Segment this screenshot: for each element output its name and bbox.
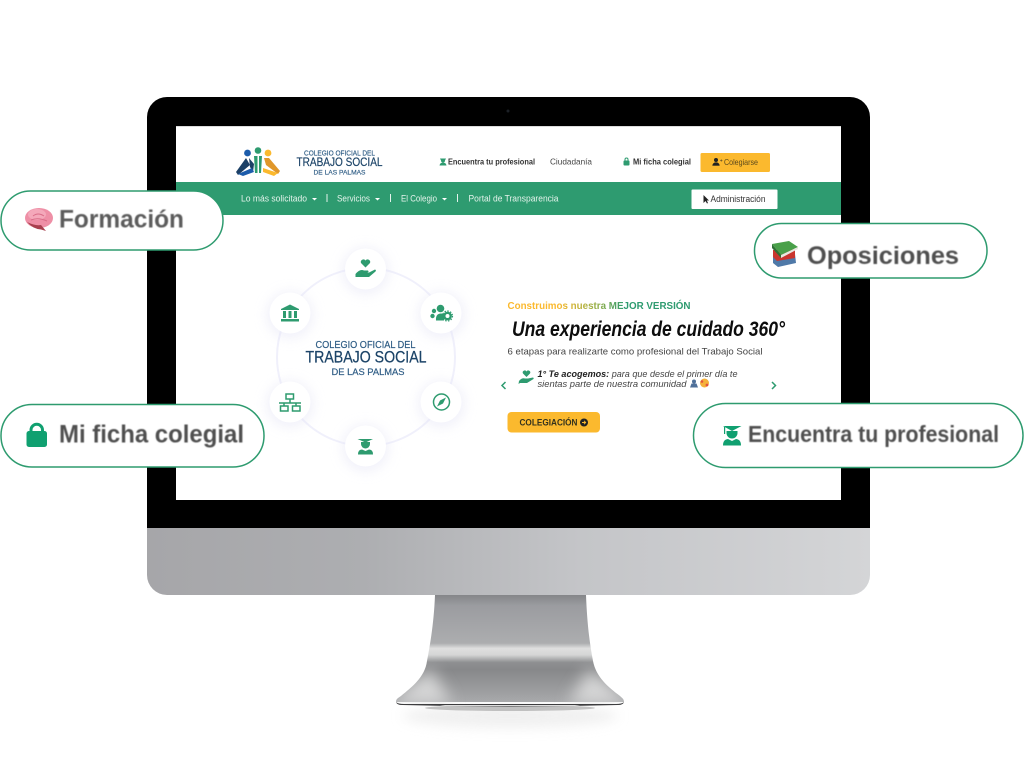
pill: oposiciones <box>754 224 987 278</box>
button: colegiarse: Colegiarse <box>724 158 758 167</box>
node: compass <box>420 382 462 422</box>
button: colegiarse <box>700 153 770 172</box>
screen <box>176 126 841 500</box>
subtitle: 6 etapas para realizarte como profesional del Trabajo Social <box>508 346 762 358</box>
node: hand with heart <box>345 248 386 290</box>
logo wordmark: DE LAS PALMAS <box>314 170 366 176</box>
pill: formacion <box>1 191 223 250</box>
title: Una experiencia de cuidado 360° <box>512 318 785 341</box>
monitor stand <box>390 595 630 728</box>
node: institution <box>270 292 310 334</box>
label: Oposiciones <box>807 242 959 270</box>
label: Mi ficha colegial <box>59 420 244 448</box>
arrow left <box>502 382 506 389</box>
carousel text <box>538 369 738 389</box>
centre wordmark: TRABAJO SOCIAL <box>306 348 426 366</box>
navigation bar <box>176 182 841 215</box>
monitor bezel <box>147 97 870 528</box>
carousel <box>502 369 776 389</box>
website header <box>236 147 770 176</box>
nav menu <box>241 194 559 204</box>
logo wordmark <box>296 150 383 176</box>
label: Formación <box>59 206 184 234</box>
button: colegiacion <box>508 412 600 432</box>
icon: books <box>772 241 798 267</box>
pill: mi ficha colegial <box>1 404 264 467</box>
node: graduate <box>345 426 386 466</box>
pill: encuentra tu profesional <box>694 404 1023 468</box>
centre wordmark <box>306 339 426 378</box>
centre wordmark: COLEGIO OFICIAL DEL <box>316 339 416 351</box>
hero content <box>502 299 785 432</box>
label: Encuentra tu profesional <box>748 421 999 447</box>
logo <box>236 147 383 176</box>
diagram: six stages ring <box>267 248 464 471</box>
logo wordmark: TRABAJO SOCIAL <box>296 155 383 169</box>
carousel text: 1° Te acogemos: para que desde el primer día te <box>538 369 738 379</box>
node shadows <box>267 248 464 471</box>
button: administracion <box>692 190 778 209</box>
monitor chin <box>147 527 870 595</box>
icon: graduate <box>723 426 742 446</box>
nav menu: Lo más solicitado <box>241 194 307 204</box>
icon: hand with heart <box>518 370 534 384</box>
icon: lock <box>26 424 47 447</box>
node: users and gear <box>420 292 462 334</box>
carousel text: sientas parte de nuestra comunidad <box>538 379 688 389</box>
tagline: Construimos nuestra MEJOR VERSIÓN <box>508 299 690 312</box>
logo wordmark: COLEGIO OFICIAL DEL <box>304 150 375 158</box>
button: colegiacion: COLEGIACIÓN <box>520 416 578 428</box>
header link: ciudadania: Ciudadanía <box>550 158 592 166</box>
icon: emoji group <box>690 378 709 388</box>
icon: brain <box>25 208 53 231</box>
monitor <box>147 97 870 728</box>
arrow right <box>772 382 776 389</box>
header link: mi ficha colegial: Mi ficha colegial <box>633 158 691 166</box>
node: network <box>270 382 310 422</box>
header link: encuentra tu profesional: Encuentra tu profesional <box>448 158 535 166</box>
ring <box>277 268 455 446</box>
nav menu: Portal de Transparencia <box>468 194 559 204</box>
centre wordmark: DE LAS PALMAS <box>332 367 404 378</box>
nav menu: El Colegio <box>401 194 437 204</box>
logo figures <box>236 147 280 176</box>
button: administracion: Administración <box>710 194 766 204</box>
nav menu: Servicios <box>337 194 371 204</box>
